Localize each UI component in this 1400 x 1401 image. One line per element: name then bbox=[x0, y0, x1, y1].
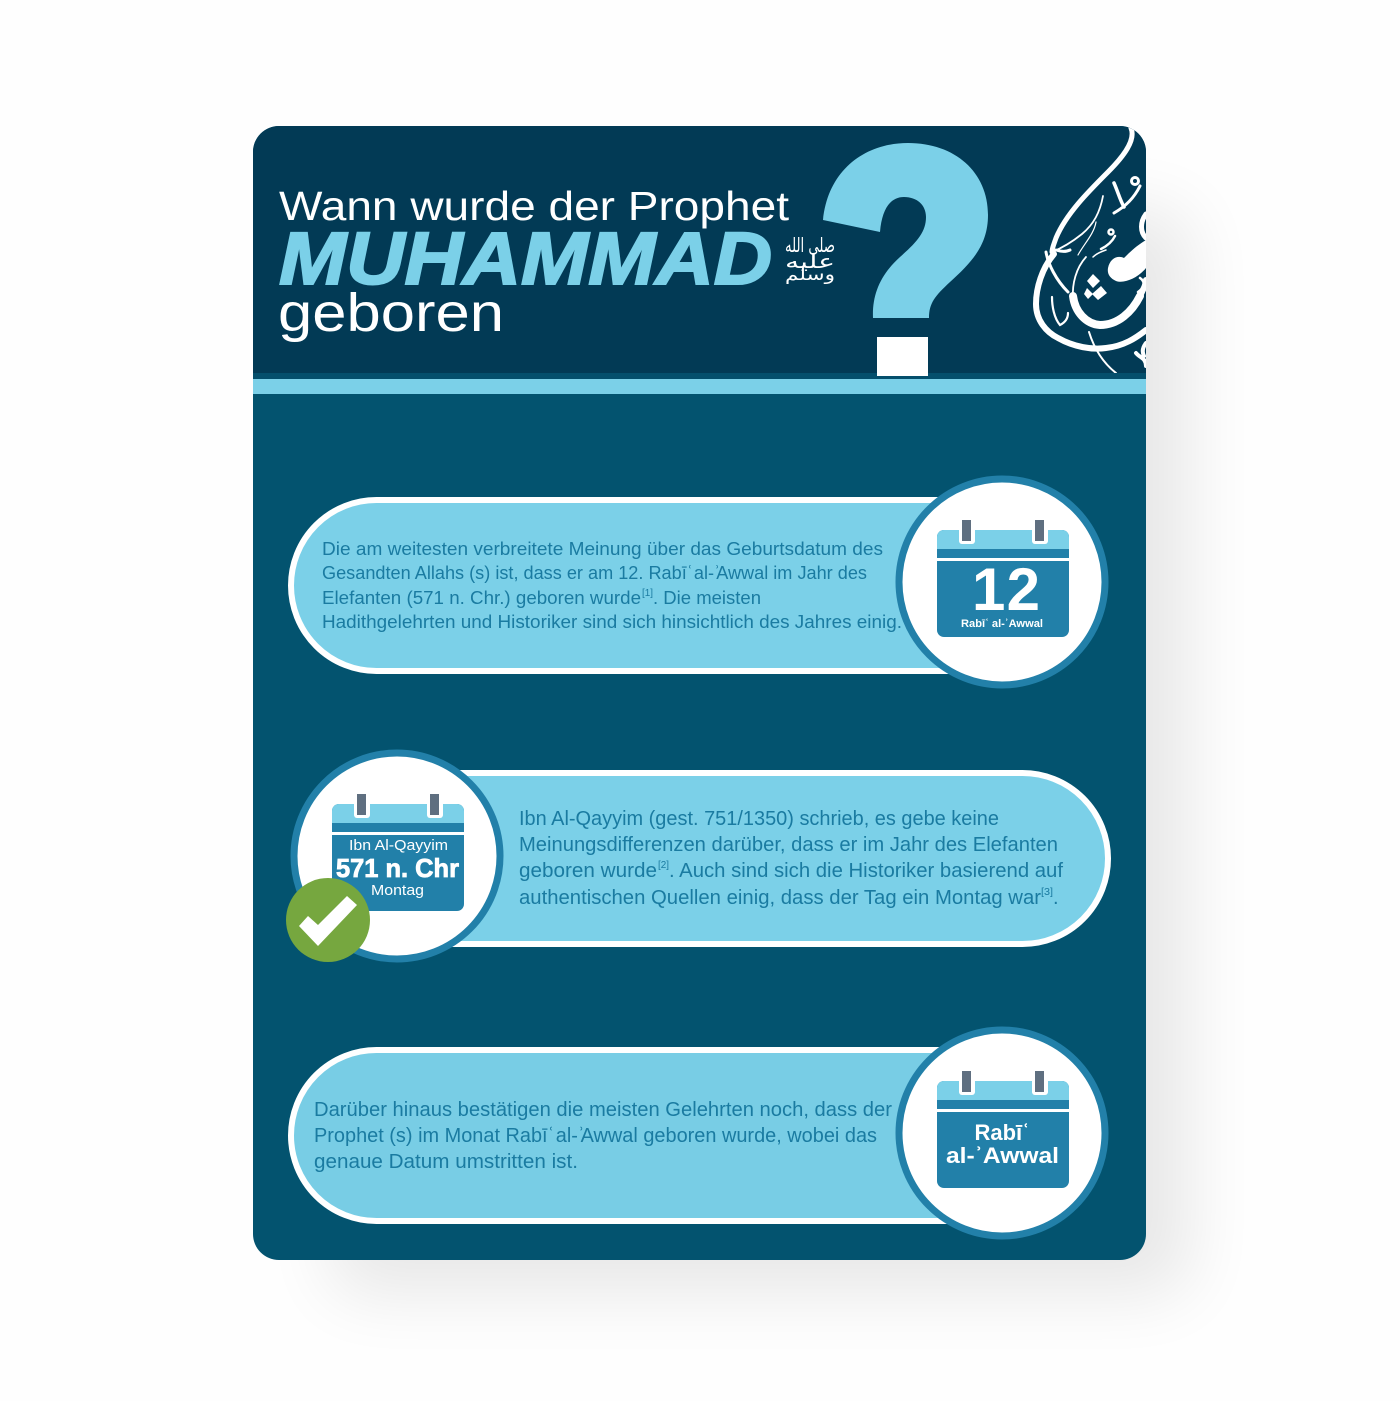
text pill 1: Elefanten (571 n. Chr.) geboren wurde bbox=[322, 587, 641, 608]
text pill 2 bbox=[452, 770, 1111, 947]
text pill 1: . Die meisten bbox=[653, 587, 761, 608]
text pill 2: Meinungsdifferenzen darüber, dass er im Jahr des Elefanten bbox=[519, 834, 1058, 856]
panel: month of birth bbox=[291, 1030, 1105, 1236]
text pill 2: Ibn Al-Qayyim (gest. 751/1350) schrieb, es gebe keine bbox=[519, 808, 999, 830]
calendar badge Rabi al-Awwal bbox=[899, 1030, 1105, 1236]
text pill 2: [3] bbox=[1041, 887, 1053, 898]
text pill 1: Die am weitesten verbreitete Meinung über das Geburtsdatum des bbox=[322, 538, 883, 559]
calendar badge 571 bbox=[294, 753, 500, 959]
title: geboren bbox=[278, 283, 504, 343]
calendar badge 12 bbox=[899, 479, 1105, 685]
calendar badge 571: 571 n. Chr bbox=[336, 853, 459, 883]
calligraphy emblem bbox=[1036, 128, 1146, 373]
calendar badge 12: 12 bbox=[972, 556, 1040, 623]
calendar badge 571: Ibn Al-Qayyim bbox=[349, 838, 448, 854]
text pill 3: genaue Datum umstritten ist. bbox=[314, 1151, 578, 1173]
text pill 2: . bbox=[1053, 887, 1059, 909]
text pill 1 bbox=[288, 497, 948, 674]
calendar badge Rabi al-Awwal: Rabīʿ bbox=[974, 1120, 1030, 1145]
text pill 2: authentischen Quellen einig, dass der Tag ein Montag war bbox=[519, 887, 1041, 909]
text pill 2: [2] bbox=[658, 860, 669, 871]
text pill 1: Gesandten Allahs (s) ist, dass er am 12. Rabīʿ al-ʾAwwal im Jahr des bbox=[322, 562, 867, 583]
text pill 1: [1] bbox=[642, 588, 653, 599]
question mark bbox=[823, 143, 988, 376]
text pill 3: Darüber hinaus bestätigen die meisten Gelehrten noch, dass der bbox=[314, 1099, 892, 1121]
honorific in Arabic: وسلم bbox=[785, 265, 835, 285]
title: MUHAMMAD bbox=[279, 217, 772, 300]
infographic card bbox=[253, 126, 1146, 1260]
calendar badge Rabi al-Awwal: al-ʾAwwal bbox=[946, 1143, 1059, 1168]
title bbox=[278, 183, 790, 343]
header panel bbox=[253, 126, 1146, 394]
panel: Ibn Al-Qayyim statement bbox=[286, 753, 1108, 962]
calendar badge 12: Rabīʿ al-ʾAwwal bbox=[961, 618, 1043, 630]
text pill 3 bbox=[288, 1047, 947, 1224]
title: Wann wurde der Prophet bbox=[279, 183, 790, 229]
text pill 1: Hadithgelehrten und Historiker sind sich hinsichtlich des Jahres einig. bbox=[322, 611, 902, 632]
text pill 2: geboren wurde bbox=[519, 860, 657, 882]
text pill 3: Prophet (s) im Monat Rabīʿ al-ʾAwwal geboren wurde, wobei das bbox=[314, 1125, 877, 1147]
honorific in Arabic: صلى الله bbox=[785, 233, 835, 257]
text pill 2: . Auch sind sich die Historiker basierend auf bbox=[669, 860, 1063, 882]
honorific in Arabic bbox=[786, 237, 834, 284]
card shadow bbox=[330, 210, 1190, 1295]
calendar badge 571: Montag bbox=[371, 883, 424, 899]
icon: green check bbox=[286, 878, 370, 962]
honorific in Arabic: عليه bbox=[785, 251, 835, 273]
panel: opinion on 12 Rabi al-Awwal bbox=[291, 479, 1105, 685]
